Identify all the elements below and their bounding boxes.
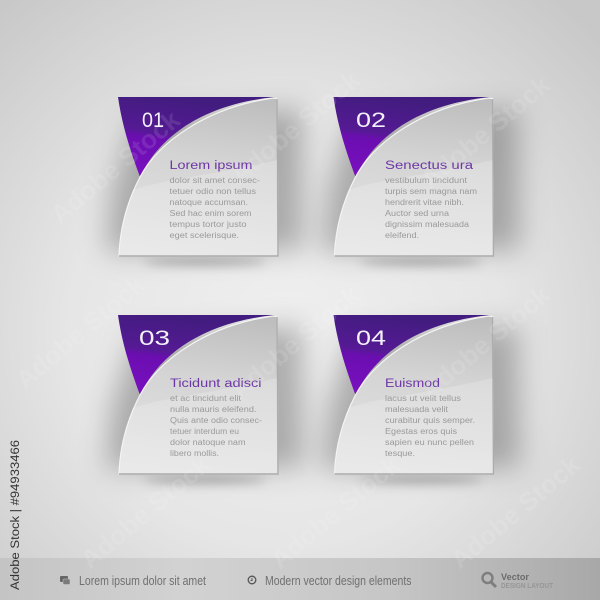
grey glass panel [334,316,494,474]
icon: magnifier [482,573,496,587]
body text: tetuer interdum eu [170,427,239,436]
body text: eget scelerisque. [170,231,239,240]
grey glass panel [119,316,278,474]
number: 03 [139,327,170,350]
watermark: Adobe Stock [445,449,586,575]
purple corner [334,97,490,177]
body text: dolor natoque nam [170,438,246,447]
watermark: Adobe Stock [265,449,406,575]
body text: curabitur quis semper. [385,416,475,425]
card 04 [322,315,520,483]
icon: speech bubbles [60,576,70,584]
heading: Senectus ura [385,160,474,172]
panel edge [119,99,278,256]
grey glass panel [119,98,278,256]
purple corner [118,97,275,177]
body text: et ac tincidunt elit [170,394,242,403]
gloss [336,160,492,255]
number: 01 [142,109,164,132]
body text: eleifend. [385,231,419,240]
body text [385,394,475,458]
card 01 [106,97,304,265]
gloss [336,378,492,473]
vertical stock credit: Adobe Stock | #94933466 [10,440,22,590]
logo [482,572,553,590]
body text: vestibulum tincidunt [385,176,468,185]
body text [170,394,262,458]
card 02 [322,97,520,265]
body text: tempus tortor justo [170,220,247,229]
gloss [120,378,277,473]
body text: Egestas eros quis [385,427,457,436]
number: 04 [356,327,386,350]
watermark: Adobe Stock [415,69,556,195]
heading: Euismod [385,378,440,390]
body text: Sed hac enim sorem [170,209,252,218]
purple corner [334,315,490,395]
body text: natoque accumsan. [170,198,248,207]
body text: tetuer odio non tellus [170,187,256,196]
gloss [120,160,277,255]
footer text left: Lorem ipsum dolor sit amet [79,574,206,588]
icon: clock [248,576,256,584]
body text: dignissim malesuada [385,220,470,229]
body text: nulla mauris eleifend. [170,405,256,414]
panel edge [334,317,494,474]
watermark: Adobe Stock [225,64,366,190]
body text: sapien eu nunc pellen [385,438,474,447]
watermark: Adobe Stock [75,449,216,575]
logo subtitle: DESIGN LAYOUT [501,581,553,590]
body text: dolor sit amet consec- [170,176,260,185]
watermark: Adobe Stock [415,279,556,405]
footer text right: Modern vector design elements [265,574,412,588]
watermark: Adobe Stock [225,279,366,405]
body text: hendrerit vitae nibh. [385,198,464,207]
body text: malesuada velit [385,405,449,414]
card 03 [106,315,304,483]
grey glass panel [334,98,494,256]
body text: turpis sem magna nam [385,187,477,196]
heading: Lorem ipsum [170,160,252,172]
number: 02 [356,109,386,132]
body text: libero mollis. [170,449,219,458]
body text: Quis ante odio consec- [170,416,262,425]
body text [170,176,260,240]
purple corner [118,315,275,395]
panel edge [334,99,494,256]
watermark: Adobe Stock [10,269,151,395]
body text: lacus ut velit tellus [385,394,461,403]
body text [385,176,477,240]
body text: Auctor sed urna [385,209,450,218]
footer bar [0,558,600,600]
body text: tesque. [385,449,415,458]
heading: Ticidunt adisci [170,378,262,390]
logo word: Vector [501,572,529,583]
panel edge [119,317,278,474]
watermark: Adobe Stock [45,104,186,230]
